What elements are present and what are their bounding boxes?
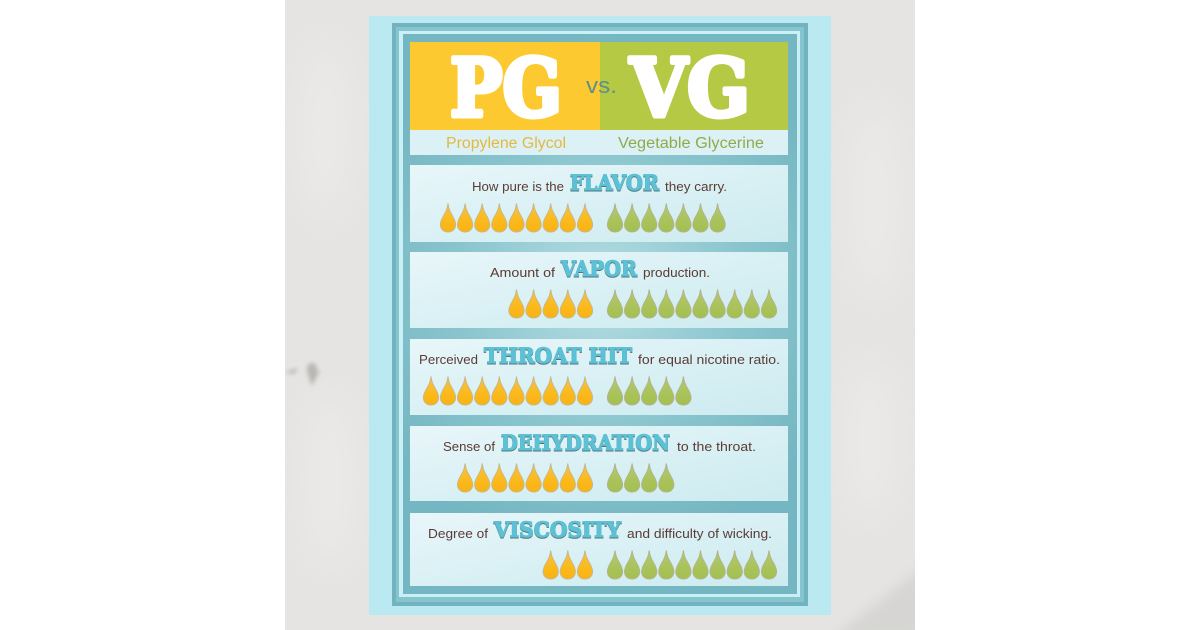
text: dehydration: DEHYDRATION <box>501 430 670 455</box>
frame <box>392 23 808 606</box>
text: flavor <box>472 170 727 195</box>
text: throat hit: for equal nicotine ratio. <box>638 352 780 367</box>
text: viscosity: VISCOSITY <box>493 517 622 542</box>
text: throat hit <box>419 343 780 368</box>
text: dehydration <box>443 430 756 455</box>
text: dehydration: to the throat. <box>677 439 756 454</box>
panel: flavor <box>410 165 788 242</box>
drops: VG 10 <box>607 550 777 579</box>
text: vapor: production. <box>643 265 710 280</box>
text: throat hit: THROAT HIT <box>484 343 632 368</box>
text: vapor <box>490 256 710 281</box>
text: flavor: How pure is the <box>472 179 564 194</box>
panel: vapor <box>410 252 788 328</box>
drops: VG 5 <box>607 376 691 405</box>
text: flavor: they carry. <box>665 179 727 194</box>
card <box>369 16 831 615</box>
panel: dehydration <box>410 426 788 501</box>
text: viscosity <box>428 517 772 542</box>
text: vapor: Amount of <box>490 265 555 280</box>
text: vapor: VAPOR <box>560 256 637 281</box>
panel: viscosity <box>410 513 788 586</box>
drops: PG 5 <box>509 290 593 318</box>
drops: VG 7 <box>607 204 725 232</box>
drops: PG 8 <box>458 464 593 492</box>
drops: PG 3 <box>543 550 593 579</box>
text: viscosity: and difficulty of wicking. <box>627 526 772 541</box>
title VG: VG <box>629 41 750 135</box>
drops: VG 4 <box>607 464 674 492</box>
title PG: PG <box>450 41 562 135</box>
marble background <box>285 0 925 630</box>
header: PG vs VG <box>410 41 788 155</box>
label: Vegetable Glycerine: Vegetable Glycerine <box>618 135 764 152</box>
title vs: vs. <box>586 73 617 98</box>
text: throat hit: Perceived <box>419 352 478 367</box>
drops: PG 9 <box>440 204 593 232</box>
text: dehydration: Sense of <box>443 439 495 454</box>
drops: VG 10 <box>607 290 777 318</box>
label: Propylene Glycol: Propylene Glycol <box>446 135 566 152</box>
drops: PG 10 <box>423 376 593 405</box>
text: viscosity: Degree of <box>428 526 488 541</box>
panel: throat hit <box>410 339 788 415</box>
text: flavor: FLAVOR <box>570 170 659 195</box>
